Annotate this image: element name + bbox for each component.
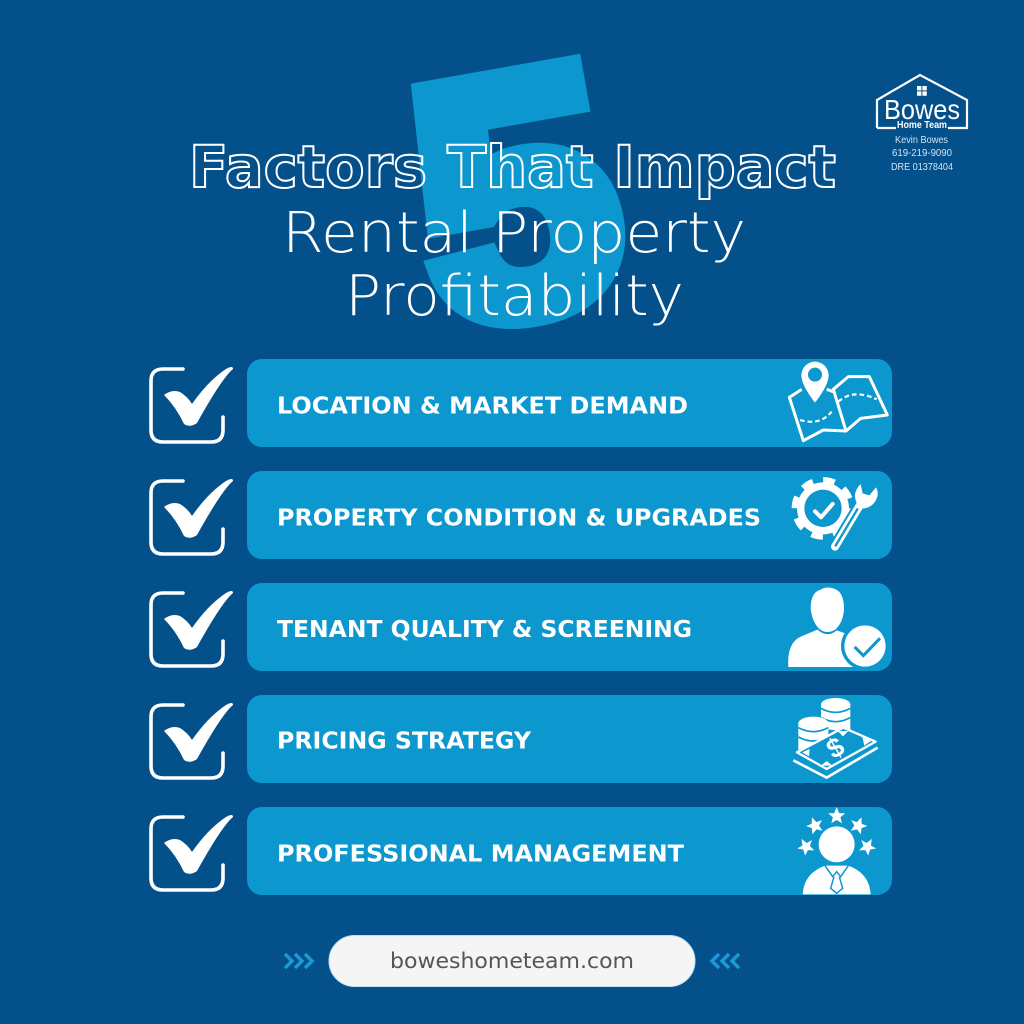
big numeral 5: 5 xyxy=(385,0,647,400)
checkbox xyxy=(151,479,233,554)
row 1: location and market demand xyxy=(151,359,892,447)
website pill xyxy=(329,936,695,986)
bar xyxy=(247,359,892,447)
icon: person with check xyxy=(788,587,889,670)
row 4: pricing strategy xyxy=(151,695,892,783)
bar xyxy=(247,807,892,895)
row 3: tenant quality and screening xyxy=(151,583,892,671)
logo: Bowes Home Team: Bowes xyxy=(884,94,960,125)
logo: Bowes Home Team: Home Team xyxy=(897,120,947,131)
icon: coins and banknote xyxy=(793,698,878,778)
checkbox xyxy=(151,591,233,666)
label: PROPERTY CONDITION & UPGRADES xyxy=(277,506,761,532)
label: PRICING STRATEGY xyxy=(277,728,531,754)
checkbox xyxy=(151,815,233,890)
label: TENANT QUALITY & SCREENING xyxy=(277,617,692,643)
bar xyxy=(247,695,892,783)
logo: Bowes Home Team: 619-219-9090 xyxy=(892,147,952,159)
arrows: left chevrons xyxy=(285,954,312,968)
title line: rental property: Rental Property xyxy=(282,201,746,266)
title xyxy=(189,133,836,329)
website pill: boweshometeam.com xyxy=(390,949,634,973)
checkbox xyxy=(151,367,233,442)
row 2: property condition and upgrades xyxy=(151,471,892,559)
bar xyxy=(247,471,892,559)
row 5: professional management xyxy=(151,807,892,895)
logo: Bowes Home Team: DRE 01378404 xyxy=(891,161,953,173)
bar xyxy=(247,583,892,671)
checkbox xyxy=(151,703,233,778)
icon: gear and wrench xyxy=(796,481,878,547)
title line: profitability: Profitability xyxy=(345,264,684,329)
logo: Bowes Home Team xyxy=(877,75,967,173)
logo: Bowes Home Team: Kevin Bowes xyxy=(895,134,948,146)
icon: manager with stars xyxy=(794,807,879,894)
title line: outlined: Factors That Impact xyxy=(189,133,836,201)
icon: map with pin xyxy=(789,362,887,441)
label: LOCATION & MARKET DEMAND xyxy=(277,394,688,420)
arrows: right chevrons xyxy=(712,954,739,968)
icon: coins and banknote: $ xyxy=(821,730,850,765)
label: PROFESSIONAL MANAGEMENT xyxy=(277,842,684,868)
